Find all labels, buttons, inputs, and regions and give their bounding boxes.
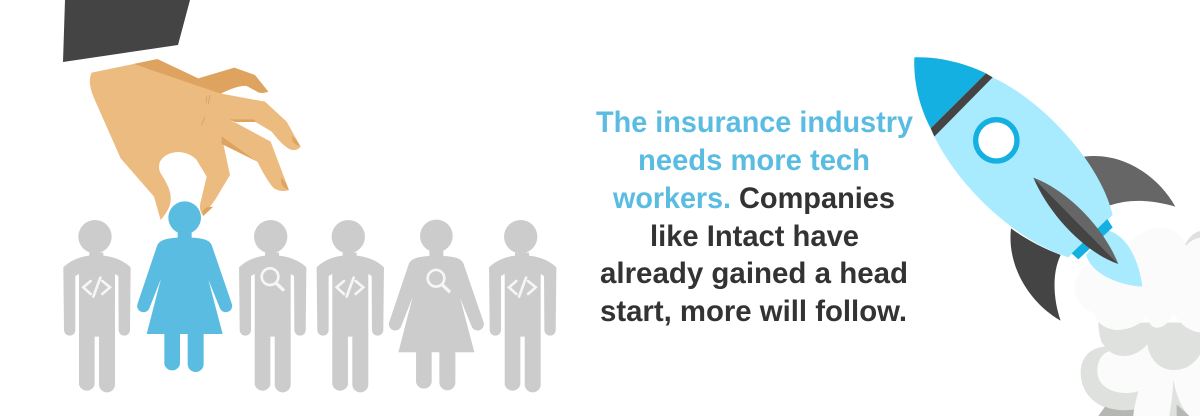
text block: message: workers.	[612, 182, 731, 215]
rocket nose cone	[914, 57, 986, 128]
knuckle creases	[202, 95, 210, 125]
rocket engine	[1072, 219, 1113, 259]
icon: reaching hand	[90, 59, 301, 220]
icon: smoke cloud	[1075, 228, 1200, 416]
rocket left fin	[1010, 228, 1061, 321]
hand shadow	[133, 59, 268, 94]
rocket flame	[1086, 231, 1142, 287]
smoke upper puffs	[1075, 228, 1200, 333]
rocket window	[976, 120, 1017, 161]
smoke grey scallops	[1098, 323, 1200, 370]
finger shading	[203, 119, 300, 216]
text block: message: like Intact have	[650, 220, 859, 253]
icon: rocket	[914, 57, 1175, 321]
rocket right fin	[1084, 156, 1175, 207]
person 4: man with code icon	[317, 220, 384, 392]
text block: message: Companies	[739, 182, 895, 215]
text block: message: needs more tech	[638, 144, 870, 177]
icon: suit sleeve	[63, 0, 190, 62]
hand palm and fingers	[90, 64, 301, 220]
smoke lower puffs	[1097, 344, 1200, 416]
text block: message: already gained a head	[600, 257, 908, 290]
smoke grey base	[1081, 231, 1200, 416]
text block: message: start, more will follow.	[600, 295, 907, 328]
rocket center fin	[1033, 178, 1118, 264]
person 5: woman with magnifier icon	[389, 220, 484, 390]
text block: message: The insurance industry	[596, 106, 913, 139]
person 2: highlighted blue woman	[137, 201, 232, 372]
person 3: man with magnifier icon	[239, 220, 306, 392]
rocket band	[931, 73, 993, 137]
smoke dark base	[1098, 404, 1189, 416]
person 1: man with code icon	[63, 220, 131, 392]
text block: message	[596, 106, 913, 328]
people row	[63, 201, 556, 392]
person 6: man with code icon	[489, 220, 556, 392]
rocket body	[934, 77, 1113, 257]
